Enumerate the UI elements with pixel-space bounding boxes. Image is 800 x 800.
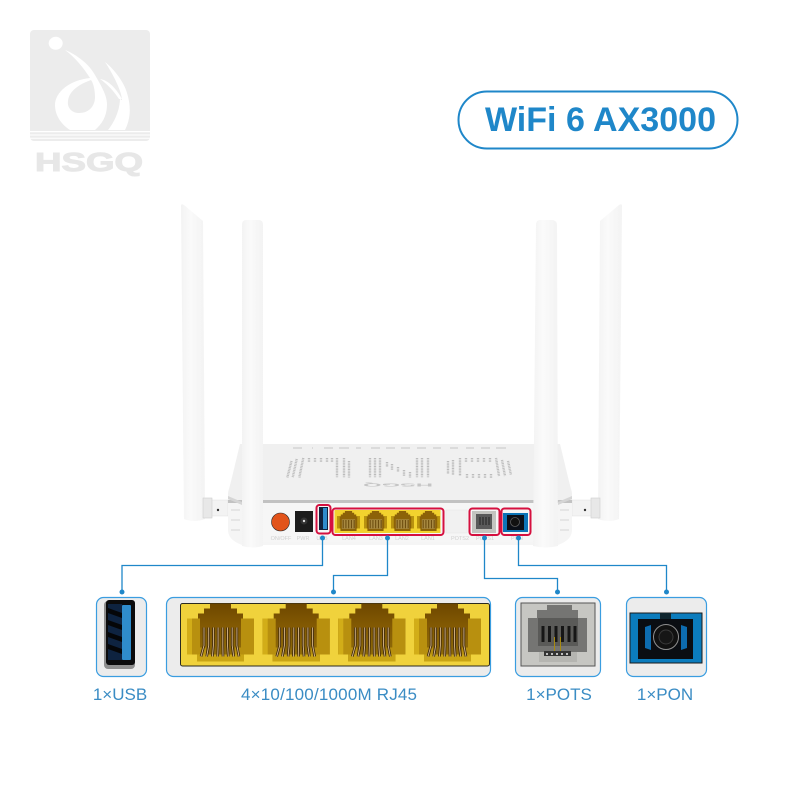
label: rj45: 4×10/100/1000M RJ45 <box>241 685 417 704</box>
usb port <box>319 507 328 530</box>
pon port <box>503 513 528 532</box>
card: RJ45 <box>166 598 490 676</box>
port labels on router: LAN1 <box>421 536 435 542</box>
port labels on router: PWR <box>297 536 309 542</box>
vent pattern on router top <box>287 458 511 478</box>
port labels on router: LAN4 <box>342 536 356 542</box>
card: PON <box>626 598 706 676</box>
label: pots: 1×POTS <box>526 685 592 704</box>
port 1 <box>187 604 254 662</box>
usb leader <box>122 538 322 592</box>
port 3 <box>338 604 405 662</box>
card labels <box>93 685 693 704</box>
lan ports <box>334 510 440 533</box>
badge: WiFi 6 AX3000: WiFi 6 AX3000 <box>485 101 716 139</box>
port 4 <box>414 604 481 662</box>
port labels on router: LAN2 <box>395 536 409 542</box>
card: POTS <box>516 598 600 676</box>
upside-down brand mark: HSGQ <box>362 482 433 487</box>
router body <box>228 444 572 545</box>
port labels on router: LAN3 <box>369 536 383 542</box>
leader lines <box>122 538 666 592</box>
logo: HSGQ <box>30 30 150 177</box>
card: USB <box>96 598 146 676</box>
small marks along top edge <box>293 447 506 449</box>
inner left antenna <box>242 220 263 548</box>
pots leader <box>484 538 558 592</box>
on/off button <box>272 513 290 531</box>
power jack <box>295 511 313 532</box>
port labels on router: POTS2 <box>451 536 469 542</box>
inner right antenna <box>533 220 558 548</box>
lan leader <box>334 538 388 592</box>
pon leader <box>518 538 666 592</box>
label: pon: 1×PON <box>637 685 693 704</box>
port 2 <box>263 604 330 662</box>
red highlights <box>316 505 530 535</box>
leader dots <box>120 536 669 594</box>
port labels on router: USB <box>316 536 328 542</box>
badge: WiFi 6 AX3000 <box>458 92 738 148</box>
logo wordmark: HSGQ <box>35 147 143 177</box>
port labels on router: ON/OFF <box>271 536 292 542</box>
port labels on router: PON <box>511 536 523 542</box>
label: usb: 1×USB <box>93 685 147 704</box>
outer left antenna <box>181 204 228 521</box>
port labels on router: POTS1 <box>476 536 494 542</box>
outer right antenna <box>572 204 622 521</box>
port labels on router <box>271 536 523 542</box>
empty pots2 blank <box>446 510 467 533</box>
router <box>181 204 622 547</box>
pots port <box>472 511 496 533</box>
